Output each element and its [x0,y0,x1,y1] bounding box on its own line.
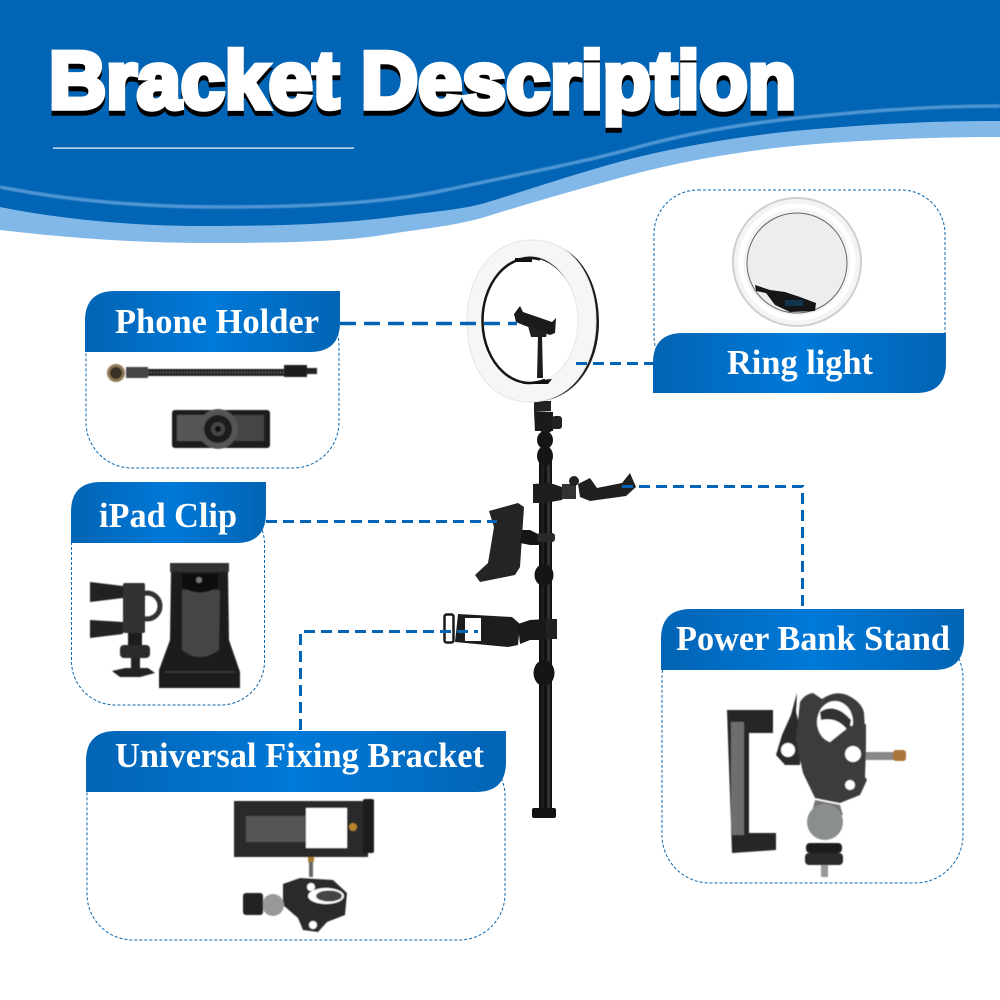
heading text: Universal Fixing Bracket [115,736,484,775]
arrow: universal bracket connector [300,632,478,730]
heading bar [71,482,266,543]
panel: universal fixing bracket [86,731,506,940]
title: Bracket Description [49,36,796,126]
pole [532,431,556,818]
icon: tablet clip [159,563,240,688]
universal bracket on pole [444,614,557,647]
icon: bar clamp with screw [776,693,906,877]
heading text: Ring light [727,343,873,382]
arrow: phone holder connector [340,322,517,325]
icon: gooseneck arm [107,364,317,382]
panel outline [87,750,505,940]
heading text: iPad Clip [99,496,237,535]
title: Bracket Description [49,41,796,131]
icon: pole clamp [90,582,160,677]
product: ring light on telescopic stand [444,240,636,818]
panel: phone holder [85,291,340,468]
arrow: power bank stand connector [622,486,802,606]
icon: phone clamp back [172,409,270,449]
iPad clip on pole [475,503,555,582]
panel: iPad clip [71,482,266,705]
heading bar [85,291,340,352]
icon: C bracket [727,710,776,853]
heading bar [661,609,964,670]
title underline [53,148,354,149]
heading text: Power Bank Stand [676,619,951,658]
icon: phone bracket [234,799,374,877]
heading bar [86,731,506,792]
icon: ring lamp [733,198,861,326]
LED ring [467,240,599,402]
panel outline [86,300,339,468]
heading text: Phone Holder [115,302,319,341]
panel: ring light [653,190,946,393]
arrow: ring light connector [576,362,653,365]
heading bar [653,333,946,393]
phone clamp on gooseneck [514,306,556,378]
power bank stand on pole [533,473,636,503]
header wave background [0,0,1000,243]
panel outline [662,630,963,883]
arrow: iPad clip connector [266,520,497,523]
panel outline [72,500,264,705]
panel: power bank stand [661,609,964,883]
ball head [534,401,562,433]
icon: bar clamp [243,878,347,932]
panel outline [654,190,945,380]
